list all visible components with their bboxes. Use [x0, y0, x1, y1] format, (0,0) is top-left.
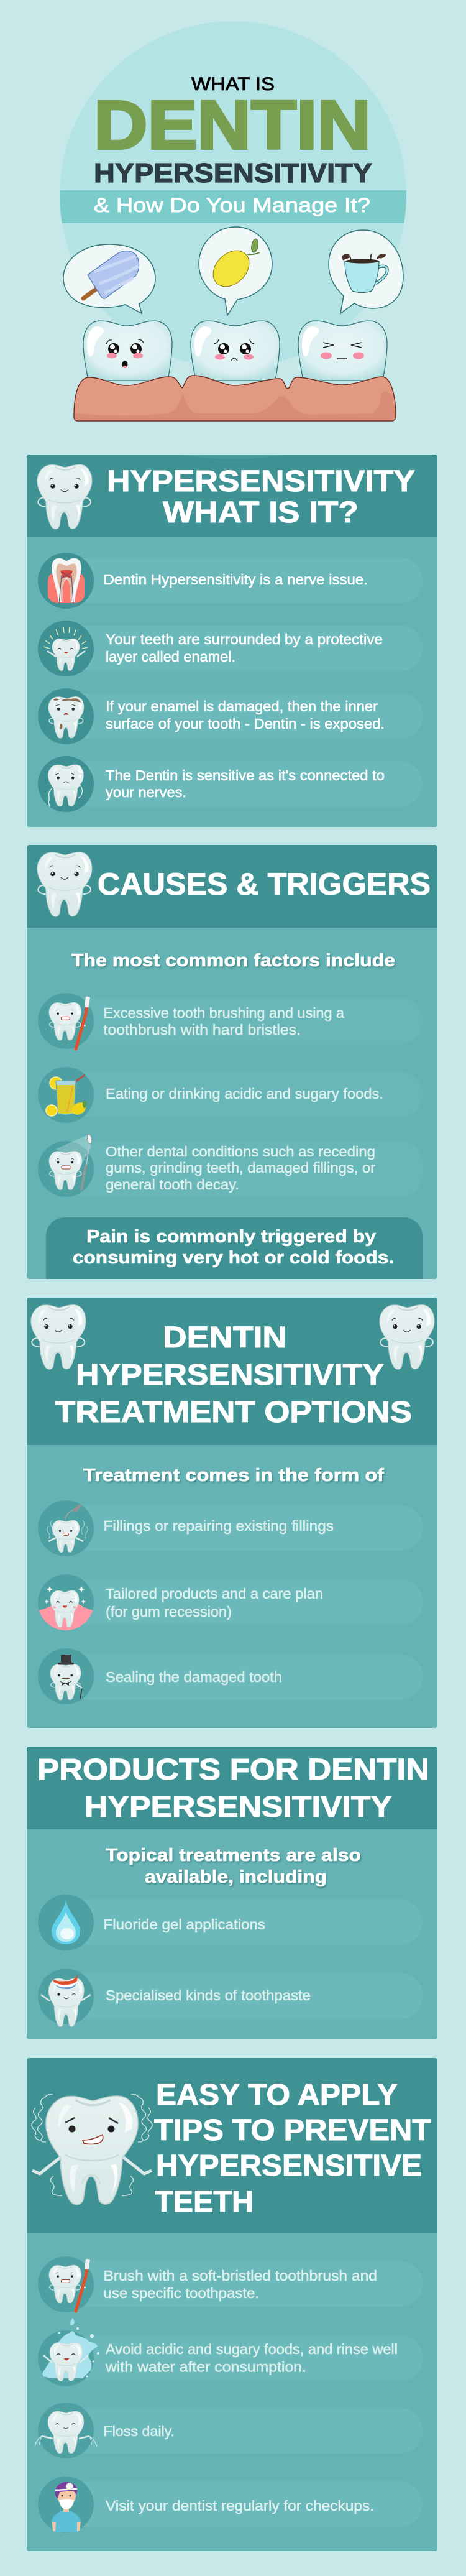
icon: tooth with dental mirror — [38, 1134, 94, 1197]
icon: trembling tooth — [32, 2094, 152, 2205]
text — [106, 767, 385, 800]
panel: prevention tips — [27, 2058, 437, 2551]
text — [106, 698, 385, 732]
panel header bar — [27, 2058, 437, 2233]
text — [105, 2341, 398, 2375]
heading: PRODUCTS FOR DENTIN — [37, 1753, 429, 1786]
row: fillings — [38, 1500, 423, 1556]
heading — [107, 465, 415, 529]
heading: HYPERSENSITIVITY — [85, 1791, 392, 1824]
heading: TEETH — [155, 2186, 254, 2218]
text: Visit your dentist regularly for checkups. — [106, 2498, 374, 2514]
panel body — [27, 1747, 437, 2039]
callout: pain triggers — [46, 1217, 423, 1279]
row: fluoride gel — [38, 1895, 423, 1950]
text: surface of your tooth - Dentin - is exposed. — [106, 716, 385, 732]
subheading: The most common factors include — [71, 951, 395, 971]
row: floss — [35, 2403, 423, 2458]
icon: smiling tooth — [37, 464, 92, 529]
text: Excessive tooth brushing and using a — [103, 1005, 344, 1021]
text: general tooth decay. — [106, 1176, 239, 1193]
icon: gentleman tooth — [38, 1648, 94, 1704]
speech bubble: lemon — [199, 227, 272, 315]
icon: water drop — [38, 1895, 94, 1950]
panel: hypersensitivity what is it — [27, 455, 437, 827]
panel: products — [27, 1747, 437, 2039]
tooth: sad — [191, 321, 280, 381]
title: dentin: DENTIN — [94, 87, 371, 164]
icon: lemonade — [38, 1067, 94, 1123]
text: (for gum recession) — [106, 1604, 232, 1620]
row: sealing — [38, 1648, 423, 1704]
heading: HYPERSENSITIVE — [156, 2149, 422, 2182]
row: connected to nerves — [38, 756, 423, 812]
icon: dentist — [38, 2477, 94, 2532]
row: rinse — [38, 2318, 423, 2386]
heading: EASY TO APPLY — [156, 2079, 398, 2112]
text: gums, grinding teeth, damaged fillings, or — [106, 1160, 375, 1176]
title band — [60, 190, 406, 223]
text: your nerves. — [106, 784, 186, 800]
row: toothpaste — [38, 1969, 423, 2027]
panel: causes and triggers — [27, 845, 437, 1279]
text: layer called enamel. — [106, 649, 235, 665]
panel body — [27, 455, 437, 827]
text: Brush with a soft-bristled toothbrush and — [103, 2268, 377, 2284]
tooth: wincing — [298, 321, 387, 381]
heading: HYPERSENSITIVITY — [76, 1359, 384, 1392]
tooth: shocked — [83, 321, 172, 381]
icon: right tooth — [380, 1305, 434, 1369]
heading — [55, 1321, 412, 1429]
callout: pain triggers: Pain is commonly triggered by — [86, 1227, 376, 1247]
heading: TREATMENT OPTIONS — [55, 1396, 412, 1429]
row: soft brush — [38, 2256, 423, 2312]
heading: HYPERSENSITIVITY — [107, 465, 415, 498]
text: Sealing the damaged tooth — [106, 1669, 282, 1685]
panel header bar — [27, 455, 437, 537]
heading: DENTIN — [163, 1321, 286, 1354]
subtitle: & How Do You Manage It? — [94, 194, 370, 216]
icon: tooth with gums — [37, 1574, 94, 1632]
icon: tooth with toothbrush — [38, 993, 94, 1049]
row: nerve issue — [38, 553, 423, 609]
heading: WHAT IS IT? — [163, 496, 359, 529]
heading — [37, 1753, 429, 1824]
icon: stained tooth — [38, 688, 94, 744]
row: acidic foods — [38, 1067, 423, 1123]
text: use specific toothpaste. — [103, 2285, 259, 2301]
text: Dentin Hypersensitivity is a nerve issue. — [103, 571, 368, 588]
panel header bar — [27, 845, 437, 928]
row: tailored products — [38, 1574, 322, 1630]
panel: treatment options — [27, 1298, 437, 1728]
hero circle backdrop — [60, 21, 406, 368]
text: Floss daily. — [103, 2423, 175, 2439]
row: dentist — [38, 2477, 423, 2532]
title: hypersensitivity: HYPERSENSITIVITY — [94, 158, 372, 188]
heading — [154, 2079, 431, 2218]
panel body — [27, 845, 437, 1279]
speech bubble: hot drink — [329, 230, 403, 313]
row: enamel — [38, 621, 423, 676]
text — [106, 1586, 323, 1620]
text — [106, 631, 383, 665]
icon: tooth with dental tool — [38, 1500, 94, 1556]
text: The Dentin is sensitive as it's connected to — [106, 767, 385, 783]
row: damaged enamel — [38, 688, 423, 744]
panel header bar — [27, 1298, 437, 1445]
text: Avoid acidic and sugary foods, and rinse well — [106, 2341, 398, 2357]
row: brushing — [38, 993, 423, 1049]
icon: chipped tooth — [38, 756, 94, 812]
row: dental conditions — [38, 1134, 423, 1197]
text: Fluoride gel applications — [103, 1916, 265, 1932]
text: Eating or drinking acidic and sugary foods. — [106, 1086, 383, 1102]
subheading: Topical treatments are also — [106, 1845, 361, 1865]
subheading: available, including — [145, 1867, 327, 1887]
speech bubble: popsicle — [63, 244, 155, 313]
text — [103, 2268, 377, 2301]
icon: tooth with toothbrush — [38, 2256, 94, 2312]
panel body — [27, 1298, 437, 1728]
subheading — [106, 1845, 361, 1887]
icon: smiling tooth — [37, 852, 92, 916]
icon: tooth with floss — [35, 2403, 97, 2458]
text: with water after consumption. — [105, 2359, 306, 2375]
icon: sparkling tooth — [38, 621, 94, 676]
text — [103, 1005, 344, 1038]
text: Your teeth are surrounded by a protective — [106, 631, 383, 647]
text: Tailored products and a care plan — [106, 1586, 323, 1602]
heading: TIPS TO PREVENT — [154, 2114, 431, 2147]
panel header bar — [27, 1747, 437, 1829]
teeth row illustration — [74, 321, 396, 421]
icon: left tooth — [31, 1305, 86, 1369]
panel body — [27, 2058, 437, 2551]
icon: tooth cross-section — [38, 553, 94, 609]
text: If your enamel is damaged, then the inner — [106, 698, 378, 714]
heading: CAUSES & TRIGGERS — [98, 867, 431, 902]
text: toothbrush with hard bristles. — [103, 1022, 301, 1038]
text: Specialised kinds of toothpaste — [106, 1987, 311, 2003]
text: Other dental conditions such as receding — [106, 1143, 375, 1160]
title: what is: WHAT IS — [191, 74, 275, 95]
text: Fillings or repairing existing fillings — [103, 1518, 334, 1534]
icon: tooth with water splash — [38, 2318, 99, 2386]
hero: title and teeth illustration — [60, 21, 406, 421]
gums — [74, 376, 396, 421]
callout: pain triggers: consuming very hot or cold foods. — [73, 1248, 394, 1268]
icon: tooth with toothpaste — [38, 1969, 94, 2027]
text — [106, 1143, 375, 1193]
subheading: Treatment comes in the form of — [83, 1466, 384, 1485]
